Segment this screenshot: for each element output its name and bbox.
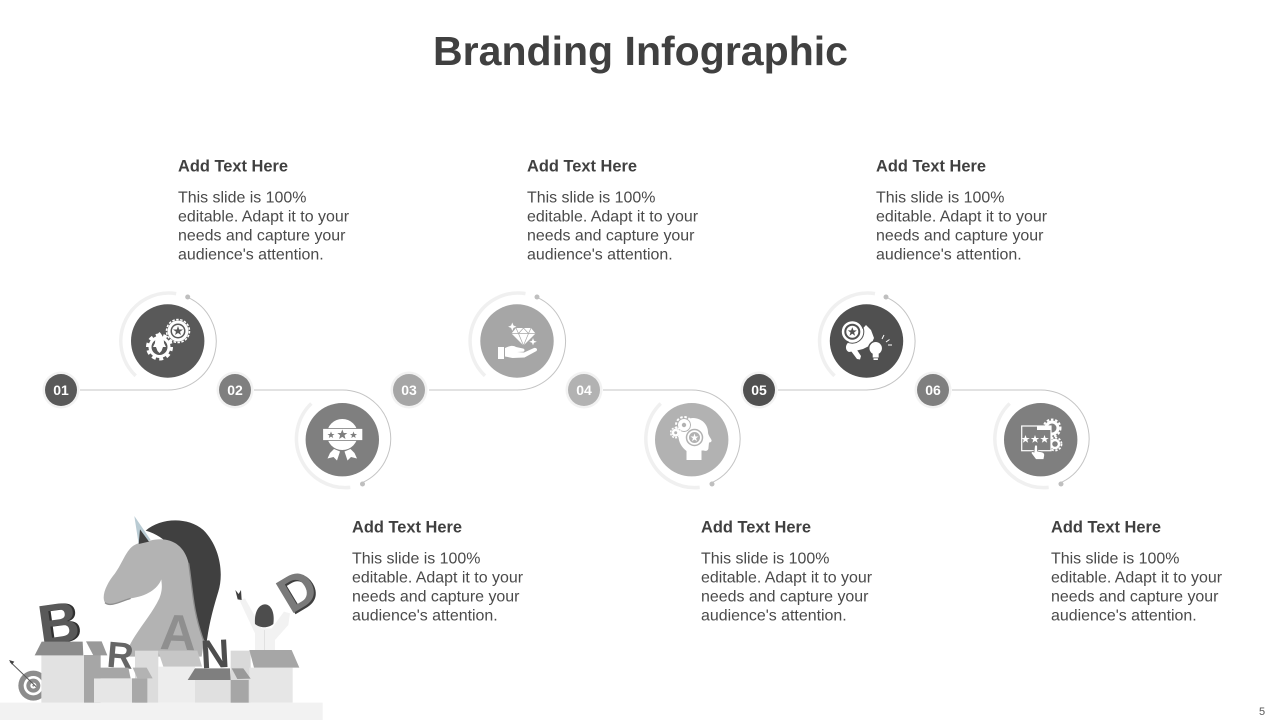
icon: award ribbon with stars bbox=[323, 419, 363, 460]
letter B: B bbox=[34, 590, 83, 658]
text block 2: Add Text Here bbox=[352, 518, 462, 536]
box 2 bbox=[89, 668, 153, 703]
step 06 bbox=[914, 372, 1089, 488]
text block 3: audience's attention. bbox=[527, 246, 673, 264]
horse bbox=[104, 516, 221, 657]
step 06: 06 bbox=[925, 382, 941, 398]
text block 6: Add Text Here bbox=[1051, 518, 1161, 536]
text block 1 bbox=[178, 158, 350, 264]
icon: diamond on open hand bbox=[498, 322, 537, 359]
step 05: 05 bbox=[751, 382, 767, 398]
letter R: R bbox=[105, 634, 135, 677]
step 04: 04 bbox=[576, 382, 592, 398]
text block 1: Add Text Here bbox=[178, 158, 288, 176]
text block 5: editable. Adapt it to your bbox=[876, 208, 1048, 226]
text block 5: Add Text Here bbox=[876, 158, 986, 176]
text block 1: needs and capture your bbox=[178, 228, 346, 244]
text block 2: audience's attention. bbox=[352, 608, 498, 624]
illustration: brand horse and boxes bbox=[0, 516, 329, 720]
text block 5: This slide is 100% bbox=[876, 190, 1004, 206]
box 3 bbox=[135, 651, 202, 703]
text block 3: editable. Adapt it to your bbox=[527, 208, 699, 226]
box 5 bbox=[231, 650, 299, 703]
floor bbox=[0, 703, 323, 720]
step 02 bbox=[216, 372, 391, 488]
letter D back: D bbox=[269, 559, 329, 625]
text block 3 bbox=[527, 158, 699, 264]
text block 4 bbox=[701, 518, 873, 624]
text block 2 bbox=[352, 518, 524, 624]
box 4 bbox=[188, 668, 251, 703]
text block 4: needs and capture your bbox=[701, 588, 869, 606]
step 01 bbox=[42, 293, 216, 408]
text block 4: Add Text Here bbox=[701, 518, 811, 536]
text block 2: needs and capture your bbox=[352, 588, 520, 606]
page number: 5 bbox=[1259, 706, 1265, 718]
text block 4: editable. Adapt it to your bbox=[701, 570, 873, 586]
text block 4: audience's attention. bbox=[701, 608, 847, 624]
letter D front: D bbox=[267, 557, 327, 624]
icon: megaphone, star badge and bulb bbox=[841, 320, 892, 360]
icon: rating window with gears and pointer bbox=[1021, 420, 1062, 460]
text block 6: audience's attention. bbox=[1051, 608, 1197, 624]
text block 2: editable. Adapt it to your bbox=[352, 570, 524, 586]
text block 1: editable. Adapt it to your bbox=[178, 208, 350, 226]
box 1 bbox=[35, 641, 107, 703]
icon: rocket gear and star badge bbox=[148, 320, 190, 359]
step 03 bbox=[390, 293, 566, 408]
text block 5 bbox=[876, 158, 1048, 264]
text block 6 bbox=[1051, 518, 1223, 624]
woman holding letter bbox=[235, 590, 290, 652]
letter A: A bbox=[159, 604, 197, 661]
step 01: 01 bbox=[53, 382, 69, 398]
letter B: B bbox=[36, 590, 86, 658]
text block 2: This slide is 100% bbox=[352, 550, 480, 568]
text block 3: Add Text Here bbox=[527, 158, 637, 176]
target with arrow bbox=[9, 660, 48, 701]
text block 6: This slide is 100% bbox=[1051, 550, 1179, 568]
text block 6: needs and capture your bbox=[1051, 588, 1219, 606]
step 04 bbox=[566, 372, 740, 488]
text block 5: audience's attention. bbox=[876, 246, 1022, 264]
text block 4: This slide is 100% bbox=[701, 550, 829, 568]
title: Branding Infographic bbox=[433, 28, 848, 74]
text block 1: This slide is 100% bbox=[178, 190, 306, 206]
text block 1: audience's attention. bbox=[178, 246, 324, 264]
step 05 bbox=[740, 293, 915, 408]
text block 5: needs and capture your bbox=[876, 228, 1044, 244]
icon: head with gears and star bbox=[671, 417, 712, 460]
text block 6: editable. Adapt it to your bbox=[1051, 570, 1223, 586]
text block 3: needs and capture your bbox=[527, 228, 695, 244]
text block 3: This slide is 100% bbox=[527, 190, 655, 206]
step 02: 02 bbox=[227, 382, 243, 398]
letter N: N bbox=[199, 632, 231, 677]
step 03: 03 bbox=[401, 382, 417, 398]
